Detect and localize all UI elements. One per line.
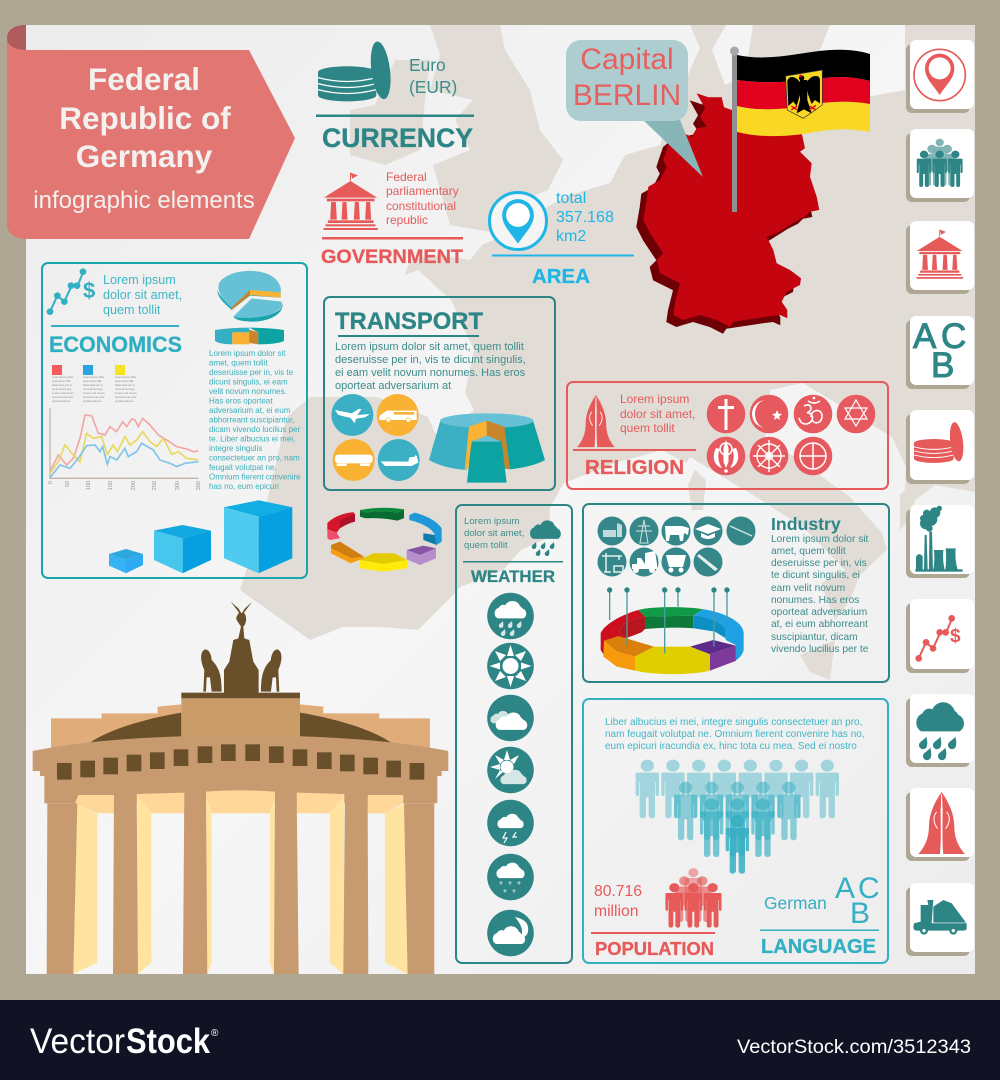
- sidebar tile: religion: [906, 788, 974, 861]
- economics text: abhorreant suscipiantur,: [209, 416, 294, 424]
- icon: snow: *: [508, 880, 512, 891]
- icon: night cloud: [487, 910, 534, 956]
- vectorstock logo: ®: [211, 1028, 219, 1039]
- flag pole: [730, 46, 739, 212]
- economics text: has no, eum epicuri: [209, 482, 279, 491]
- economics text: te. Liber albucius ei mei,: [209, 434, 295, 444]
- industry text: oporteat adversarium: [771, 607, 867, 618]
- funnel pie chart: [429, 413, 545, 483]
- sidebar tile: mining truck: [906, 883, 974, 956]
- cylinder chart: [215, 328, 284, 344]
- chart legend: oporteat advers: [52, 399, 71, 403]
- area block: [490, 190, 634, 288]
- gate attic: [181, 693, 300, 737]
- title text: [33, 61, 255, 214]
- government type: constitutional: [386, 199, 456, 213]
- chart axis labels: 350: [196, 481, 202, 490]
- chart legend: vis te dicunt sing: [52, 387, 72, 391]
- vectorstock logo: Stock: [126, 1022, 210, 1061]
- line chart: [48, 408, 202, 490]
- economics intro text: [103, 273, 182, 317]
- industry text: te dicunt singulis, ei: [771, 570, 860, 581]
- weather intro text: [464, 516, 524, 551]
- icon: snow: *: [512, 888, 516, 899]
- gate openings: [73, 790, 408, 974]
- title banner: [7, 25, 295, 239]
- religion intro text: dolor sit amet,: [620, 407, 695, 421]
- economics text: velit novum nonumes.: [209, 387, 287, 396]
- population value: [594, 883, 642, 920]
- currency value: (EUR): [409, 77, 457, 97]
- icon: snow: *: [499, 880, 503, 891]
- industry text: deseruisse per in, vis: [771, 558, 867, 569]
- chart legend: vis te dicunt sing: [115, 387, 135, 391]
- economics intro text: dolor sit amet,: [103, 288, 182, 302]
- sidebar tile: industry: [906, 505, 974, 578]
- chart axis labels: 150: [108, 481, 114, 490]
- chart legend: Lorem ipsum dolor: [83, 375, 105, 379]
- chart legend: deseruisse per in: [115, 383, 135, 387]
- industry text: Lorem ipsum dolor sit: [771, 534, 869, 545]
- icon: rain: [487, 593, 534, 639]
- vectorstock logo: Vector: [30, 1022, 125, 1061]
- gate metopes: [57, 744, 424, 780]
- transport icons: [331, 394, 420, 481]
- title text: Germany: [76, 138, 213, 174]
- title text: Republic of: [59, 100, 231, 136]
- chart legend: nonumes has eros: [83, 395, 105, 399]
- economics text: Lorem ipsum dolor sit: [209, 349, 286, 358]
- currency block: CURRENCY: [322, 123, 473, 153]
- language value: A: [835, 872, 855, 905]
- economics text: Omnium fierent convenire: [209, 472, 301, 482]
- chart axis labels: [48, 481, 202, 490]
- chart legend: Lorem ipsum dolor: [52, 375, 74, 379]
- economics panel: ECONOMICS: [49, 332, 182, 357]
- chart legend: Lorem ipsum dolor: [115, 375, 137, 379]
- economics text: deseruisse per in, vis te: [209, 368, 294, 377]
- language value: [764, 872, 880, 930]
- industry text: eam velit novum: [771, 583, 845, 594]
- religion intro text: quem tollit: [620, 421, 675, 435]
- chart legend: deseruisse per in: [52, 383, 72, 387]
- transport panel: TRANSPORT: [335, 308, 483, 335]
- transport text: Lorem ipsum dolor sit amet, quem tollit: [335, 341, 524, 353]
- economics text: adversarium at, ei eum: [209, 406, 291, 415]
- population value: 80.716: [594, 883, 642, 900]
- chart axis labels: 250: [152, 481, 158, 490]
- chart axis labels: 300: [175, 481, 181, 490]
- area block: AREA: [532, 265, 590, 288]
- weather icon: [530, 520, 561, 556]
- currency block: [316, 40, 474, 153]
- weather intro text: quem tollit: [464, 540, 508, 551]
- sidebar tile: economics: $: [950, 626, 961, 647]
- population intro text: eum epicuri iracundia ex, hinc tota cu mea. Sed ei nostro: [605, 741, 857, 752]
- government type: [386, 170, 459, 227]
- area value: 357.168: [556, 209, 614, 226]
- transport text: [335, 341, 526, 392]
- economics panel: [42, 263, 307, 578]
- transport text: oporteat adversarium at: [335, 380, 451, 392]
- religion symbols: [707, 395, 875, 475]
- chart legend: ei eam velit novum: [83, 391, 105, 395]
- capital text: BERLIN: [573, 79, 681, 112]
- weather panel: [456, 505, 572, 963]
- chart legend: amet quem tollit: [83, 379, 102, 383]
- icon: praying hands: [577, 395, 615, 447]
- icon: thunderstorm: [487, 800, 534, 846]
- area value: km2: [556, 228, 586, 245]
- religion panel: RELIGION: [585, 456, 684, 479]
- german flag: [730, 46, 870, 212]
- ring chart with pins: [601, 587, 744, 674]
- economics text: feugait volutpat ne.: [209, 463, 277, 472]
- government block: [321, 170, 463, 268]
- segmented ring diagram: [327, 508, 442, 572]
- transport text: deseruisse per in, vis te dicunt singulis,: [335, 354, 526, 366]
- vectorstock logo: [30, 1022, 219, 1061]
- transport panel: [324, 297, 555, 490]
- sidebar tile: location: [906, 40, 974, 113]
- industry text: suscipiantur, dicam: [771, 632, 858, 643]
- area value: [556, 190, 614, 245]
- sidebar tile: currency: [906, 410, 974, 484]
- economics intro text: quem tollit: [103, 303, 161, 317]
- government type: republic: [386, 213, 428, 227]
- title text: Federal: [88, 61, 200, 97]
- population and language panel: [583, 699, 888, 963]
- area value: total: [556, 190, 586, 207]
- gate columns: [47, 792, 434, 974]
- chart legend: [52, 365, 137, 403]
- economics text: integre singulis: [209, 444, 262, 453]
- pie chart: [217, 271, 283, 322]
- chart legend: nonumes has eros: [52, 395, 74, 399]
- economics text: dicunt singulis, ei eam: [209, 378, 288, 386]
- weather intro text: Lorem ipsum: [464, 516, 519, 527]
- chart axis labels: 0: [48, 481, 54, 484]
- icon: snow: [487, 854, 534, 900]
- industry icons: [598, 516, 756, 576]
- capital speech bubble: [566, 40, 703, 177]
- religion intro text: [620, 392, 695, 435]
- economics text: dicam vivendo lucilius per: [209, 425, 300, 434]
- population intro text: Liber albucius ei mei, integre singulis consectetuer an pro,: [605, 717, 862, 728]
- quadriga statue: [201, 602, 281, 693]
- population and language panel: POPULATION: [595, 939, 714, 959]
- chart axis labels: 100: [86, 481, 92, 490]
- industry text: amet, quem tollit: [771, 546, 846, 557]
- icon: cloudy: [487, 695, 534, 741]
- capital text: [573, 43, 681, 112]
- brandenburg gate: [33, 602, 448, 974]
- sidebar tile: people: [906, 129, 974, 202]
- icon: sun and cloud: [487, 747, 534, 793]
- footer bar: [0, 1000, 1000, 1080]
- economics text: [209, 349, 301, 491]
- sidebar tile: language: B: [931, 346, 954, 385]
- religion intro text: Lorem ipsum: [620, 392, 689, 406]
- currency value: Euro: [409, 55, 446, 75]
- icon: snow: *: [503, 888, 507, 899]
- germany map: [636, 93, 819, 334]
- industry text: at, ei eum abhorreant: [771, 619, 868, 630]
- chart legend: amet quem tollit: [52, 379, 71, 383]
- chart legend: ei eam velit novum: [115, 391, 137, 395]
- economics icon: [47, 268, 95, 315]
- chart legend: oporteat advers: [115, 399, 134, 403]
- image id: VectorStock.com/3512343: [737, 1037, 971, 1058]
- industry panel: [583, 504, 889, 682]
- economics text: consectetuer an pro, nam: [209, 454, 300, 462]
- economics intro text: Lorem ipsum: [103, 273, 176, 287]
- chart axis labels: 200: [131, 481, 137, 490]
- religion panel: [567, 382, 888, 489]
- population intro text: nam feugait volutpat ne. Omnium fierent convenire has no,: [605, 729, 865, 740]
- population and language panel: LANGUAGE: [761, 936, 876, 958]
- sidebar tile: language: [906, 316, 974, 389]
- coat of arms: [786, 70, 822, 118]
- industry text: [771, 534, 869, 655]
- language value: C: [858, 872, 880, 905]
- 3d cubes: [109, 500, 292, 573]
- chart legend: vis te dicunt sing: [83, 387, 103, 391]
- population value: million: [594, 903, 638, 920]
- transport text: ei eam velit novum nonumes. Has eros: [335, 367, 526, 379]
- icon: sun: [487, 643, 534, 689]
- people pictogram: [636, 760, 839, 874]
- chart legend: oporteat advers: [83, 399, 102, 403]
- government type: parliamentary: [386, 184, 459, 198]
- background map of Europe: [240, 25, 975, 680]
- chart legend: nonumes has eros: [115, 395, 137, 399]
- chart legend: ei eam velit novum: [52, 391, 74, 395]
- weather panel: WEATHER: [471, 567, 555, 586]
- title text: infographic elements: [33, 187, 255, 214]
- icon: snow: *: [517, 880, 521, 891]
- language value: German: [764, 893, 827, 913]
- sidebar tile: language: A: [913, 317, 937, 356]
- weather intro text: dolor sit amet,: [464, 528, 524, 539]
- sidebar tile: language: C: [941, 317, 966, 356]
- chart legend: amet quem tollit: [115, 379, 134, 383]
- industry panel: Industry: [771, 514, 841, 534]
- icon: red people group: [665, 868, 722, 928]
- sidebar tile: weather: [906, 694, 974, 767]
- sidebar tile: economics: [906, 599, 974, 673]
- industry text: vivendo lucilius per te: [771, 644, 869, 655]
- capital text: Capital: [580, 43, 674, 76]
- government block: GOVERNMENT: [321, 246, 463, 268]
- government type: Federal: [386, 170, 427, 184]
- economics icon: $: [83, 278, 95, 303]
- economics text: amet, quem tollit: [209, 358, 268, 368]
- language value: B: [850, 897, 870, 930]
- economics text: Has eros oporteat: [209, 396, 273, 406]
- chart legend: deseruisse per in: [83, 383, 103, 387]
- industry text: nonumes. Has eros: [771, 595, 859, 606]
- population intro text: [605, 717, 865, 752]
- currency value: [409, 55, 457, 97]
- sidebar tile: government: [906, 221, 974, 294]
- chart axis labels: 50: [65, 481, 71, 487]
